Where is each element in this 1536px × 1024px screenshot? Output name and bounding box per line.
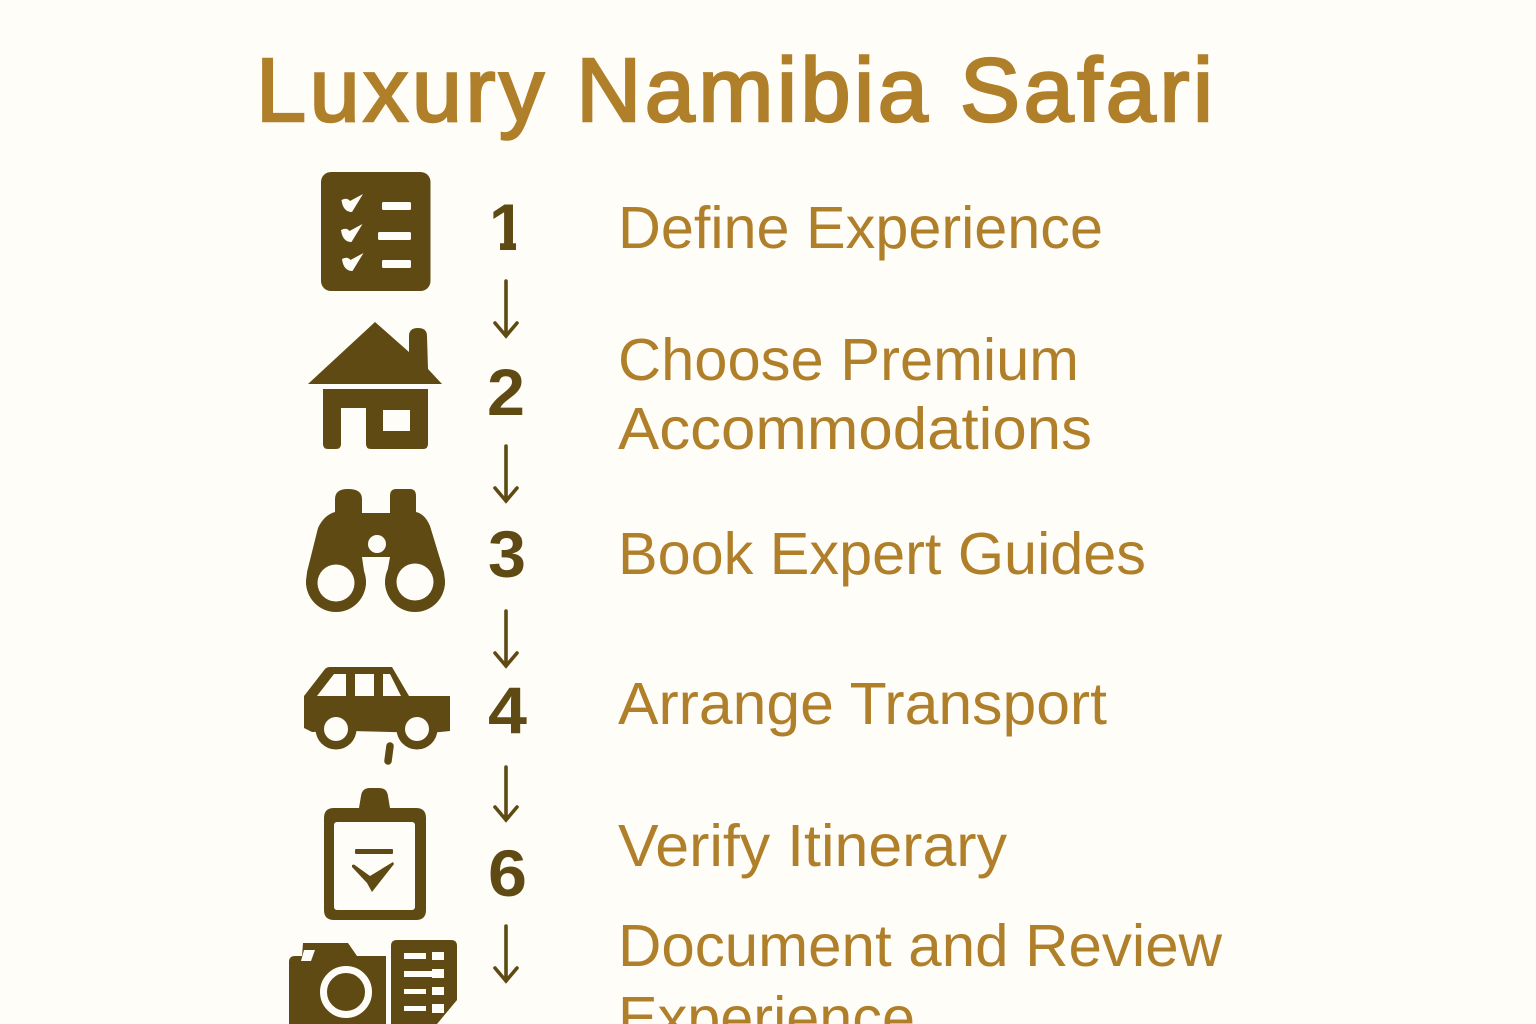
- icon: clipboard check: [324, 788, 426, 920]
- label: step 6: Document and Review: [618, 913, 1222, 979]
- icon: safari vehicle: [304, 667, 450, 761]
- icon: binoculars: [306, 489, 445, 612]
- label: step 5: Verify Itinerary: [618, 813, 1008, 879]
- label: step 2: Choose Premium: [618, 327, 1079, 393]
- step number 2: 2: [487, 355, 525, 429]
- icon: lodge house: [308, 322, 442, 449]
- label: step 1: Define Experience: [618, 195, 1103, 261]
- arrow 1 to 2: [495, 281, 517, 336]
- arrow 2 to 3: [495, 446, 517, 501]
- icon: camera and document: [289, 940, 457, 1024]
- step number 6: 6: [488, 836, 527, 910]
- label: step 4: Arrange Transport: [618, 671, 1107, 737]
- arrow 4 to 6: [495, 767, 517, 820]
- label: step 3: Book Expert Guides: [618, 521, 1146, 587]
- arrow 6 to end: [495, 926, 517, 981]
- step number 3: 3: [488, 517, 526, 591]
- label: step 2: [618, 327, 1092, 462]
- label: step 2: Accommodations: [618, 396, 1092, 462]
- step number 1: 1: [489, 190, 525, 264]
- title: Luxury Namibia Safari: [256, 41, 1213, 141]
- icon: checklist: [321, 172, 430, 291]
- label: step 6: [618, 913, 1222, 1024]
- arrow 3 to 4: [495, 611, 517, 666]
- step number 4: 4: [488, 673, 527, 747]
